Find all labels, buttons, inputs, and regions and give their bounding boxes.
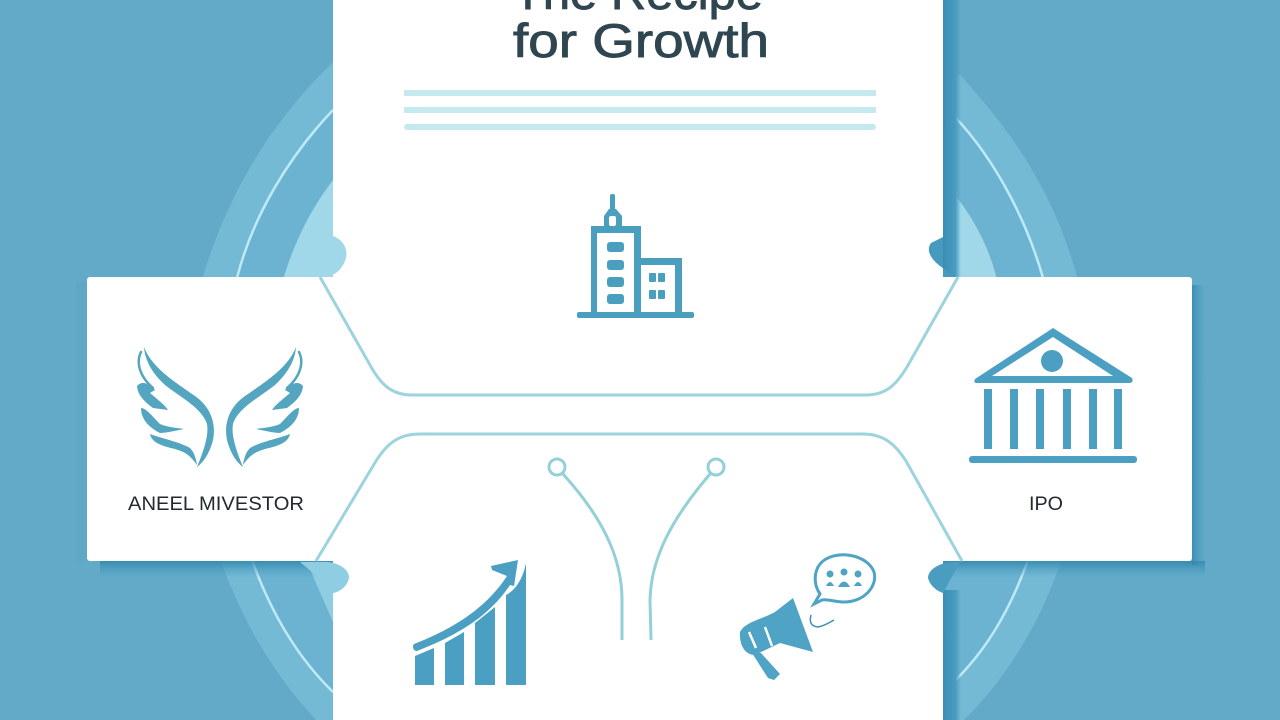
icon: megaphone with speech bubble [740,555,875,680]
label: IPO: IPO [1029,494,1063,515]
title: for Growth [513,14,769,67]
branching connector [549,459,724,640]
corner tabs [300,236,960,593]
panel: left card [87,277,347,561]
icon: office building [577,194,694,318]
title [513,0,769,67]
title underlines [404,90,876,130]
decorative arcs: top left [202,62,333,280]
panel: right card [930,277,1192,561]
decorative arcs: bottom left [220,558,333,720]
icon: angel wings [137,347,303,467]
decorative arcs: bottom right [943,558,1062,720]
connector outline: lower [316,434,962,561]
label: angel investor: ANEEL MIVESTOR [128,494,304,515]
decorative arcs: top right [943,75,1078,280]
connector outline: upper [320,277,958,395]
panel: central column [333,0,943,720]
icon: growth chart [413,560,526,685]
icon: stock exchange bank [969,328,1137,463]
